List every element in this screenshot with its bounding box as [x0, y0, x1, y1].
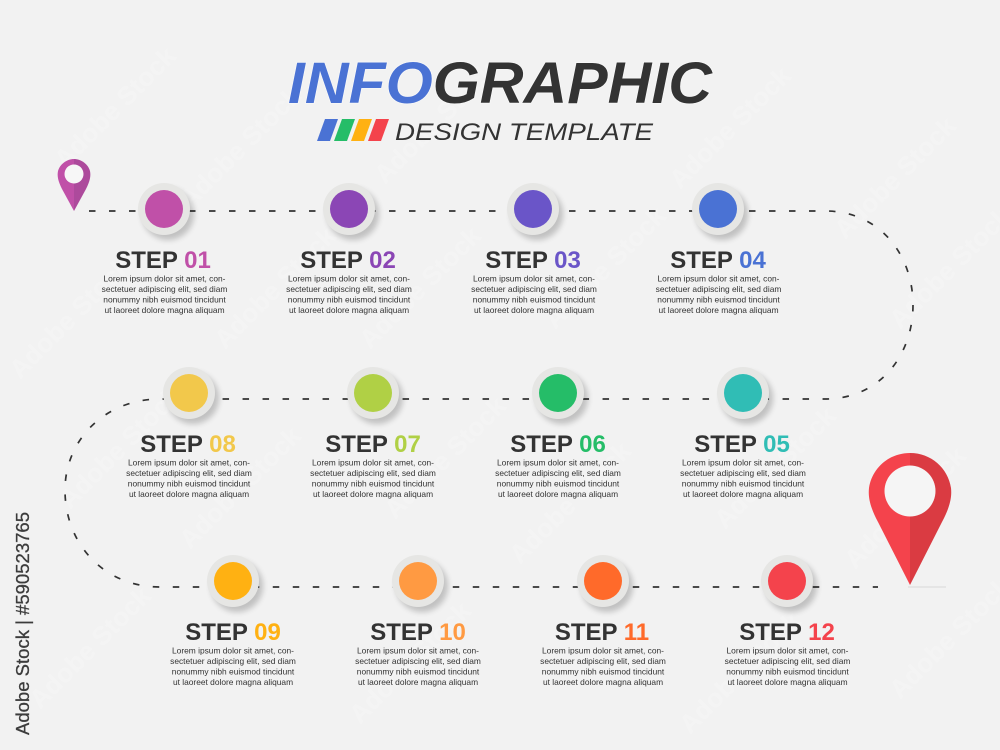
title: INFOGRAPHIC — [288, 51, 713, 116]
step 04: ut laoreet dolore magna aliquam — [658, 305, 779, 315]
step 05: STEP 05 — [694, 431, 790, 458]
step 07: sectetuer adipiscing elit, sed diam — [310, 468, 436, 478]
text: Adobe Stock — [378, 390, 512, 524]
step 07: STEP 07 — [325, 431, 421, 458]
step 03 — [471, 183, 597, 315]
step 03: nonummy nibh euismod tincidunt — [473, 294, 596, 304]
text: Adobe Stock — [673, 605, 807, 739]
step 09: STEP 09 — [185, 619, 281, 646]
step 11: sectetuer adipiscing elit, sed diam — [540, 656, 666, 666]
dashed route path — [65, 211, 913, 587]
step 06: sectetuer adipiscing elit, sed diam — [495, 468, 621, 478]
step 10 — [355, 555, 481, 687]
step 08: Lorem ipsum dolor sit amet, con- — [128, 458, 250, 468]
step 12: Lorem ipsum dolor sit amet, con- — [727, 646, 849, 656]
step 08: ut laoreet dolore magna aliquam — [129, 489, 249, 499]
step 05 — [680, 367, 806, 499]
step 12: sectetuer adipiscing elit, sed diam — [725, 656, 850, 666]
step 02: sectetuer adipiscing elit, sed diam — [286, 284, 412, 294]
step 11: ut laoreet dolore magna aliquam — [543, 677, 663, 687]
step 06: nonummy nibh euismod tincidunt — [497, 478, 620, 488]
step 07 — [310, 367, 436, 499]
text: Adobe Stock — [368, 55, 502, 189]
step 12 — [725, 555, 850, 687]
step 10: STEP 10 — [370, 619, 466, 646]
step 07: Lorem ipsum dolor sit amet, con- — [312, 458, 434, 468]
icon: finish pin — [869, 453, 951, 588]
step 01: STEP 01 — [115, 247, 211, 274]
text: Adobe Stock — [708, 400, 842, 534]
text: Adobe Stock — [23, 580, 157, 714]
text: Adobe Stock — [3, 250, 137, 384]
text: Adobe Stock — [353, 220, 487, 354]
text: Adobe Stock — [663, 60, 797, 194]
text: Adobe Stock — [538, 200, 672, 334]
step 02: Lorem ipsum dolor sit amet, con- — [288, 274, 410, 284]
step 12: STEP 12 — [739, 619, 835, 646]
step 07: nonummy nibh euismod tincidunt — [312, 478, 435, 488]
step 06 — [495, 367, 621, 499]
text: Adobe Stock — [343, 595, 477, 729]
step 08: sectetuer adipiscing elit, sed diam — [126, 468, 252, 478]
step 05: sectetuer adipiscing elit, sed diam — [680, 468, 806, 478]
step 05: Lorem ipsum dolor sit amet, con- — [682, 458, 804, 468]
step 04: Lorem ipsum dolor sit amet, con- — [658, 274, 780, 284]
step 07: ut laoreet dolore magna aliquam — [313, 489, 433, 499]
step 05: nonummy nibh euismod tincidunt — [682, 478, 805, 488]
step 02: ut laoreet dolore magna aliquam — [289, 305, 409, 315]
step 10: sectetuer adipiscing elit, sed diam — [355, 656, 481, 666]
icon: colour stripes — [317, 119, 389, 141]
step 10: nonummy nibh euismod tincidunt — [357, 666, 480, 676]
step 12: ut laoreet dolore magna aliquam — [727, 677, 848, 687]
step 01: nonummy nibh euismod tincidunt — [103, 294, 226, 304]
text: Adobe Stock — [48, 40, 182, 174]
step 08: STEP 08 — [140, 431, 236, 458]
stock credit: Adobe Stock | #590523765 — [13, 512, 33, 735]
step 04: sectetuer adipiscing elit, sed diam — [656, 284, 781, 294]
step 09: Lorem ipsum dolor sit amet, con- — [172, 646, 294, 656]
step 01: ut laoreet dolore magna aliquam — [104, 305, 225, 315]
step 04 — [656, 183, 781, 315]
step 11: STEP 11 — [555, 619, 649, 646]
step 03: sectetuer adipiscing elit, sed diam — [471, 284, 597, 294]
step 11 — [540, 555, 666, 687]
step 02: nonummy nibh euismod tincidunt — [288, 294, 411, 304]
step 02 — [286, 183, 412, 315]
step 10: Lorem ipsum dolor sit amet, con- — [357, 646, 479, 656]
text: Adobe Stock — [53, 380, 187, 514]
step 08: nonummy nibh euismod tincidunt — [128, 478, 251, 488]
step 11: nonummy nibh euismod tincidunt — [542, 666, 665, 676]
step 09: ut laoreet dolore magna aliquam — [173, 677, 293, 687]
text: Adobe Stock — [208, 220, 342, 354]
step 08 — [126, 367, 252, 499]
text: Adobe Stock — [828, 110, 962, 244]
step 03: ut laoreet dolore magna aliquam — [474, 305, 594, 315]
step 06: ut laoreet dolore magna aliquam — [498, 489, 618, 499]
step 03: STEP 03 — [485, 247, 581, 274]
step 09: nonummy nibh euismod tincidunt — [172, 666, 295, 676]
step 02: STEP 02 — [300, 247, 396, 274]
step 10: ut laoreet dolore magna aliquam — [358, 677, 478, 687]
step 04: nonummy nibh euismod tincidunt — [657, 294, 780, 304]
text: Adobe Stock — [173, 420, 307, 554]
text: Adobe Stock — [173, 80, 307, 214]
step 05: ut laoreet dolore magna aliquam — [683, 489, 803, 499]
step 01: Lorem ipsum dolor sit amet, con- — [104, 274, 226, 284]
step 12: nonummy nibh euismod tincidunt — [726, 666, 849, 676]
text: Adobe Stock — [503, 435, 637, 569]
step 09 — [170, 555, 296, 687]
step 01: sectetuer adipiscing elit, sed diam — [102, 284, 227, 294]
subtitle: DESIGN TEMPLATE — [395, 119, 654, 146]
icon: start pin — [58, 159, 90, 211]
step 03: Lorem ipsum dolor sit amet, con- — [473, 274, 595, 284]
step 04: STEP 04 — [670, 247, 766, 274]
step 09: sectetuer adipiscing elit, sed diam — [170, 656, 296, 666]
step 11: Lorem ipsum dolor sit amet, con- — [542, 646, 664, 656]
step 06: Lorem ipsum dolor sit amet, con- — [497, 458, 619, 468]
step 01 — [102, 183, 227, 315]
text: Adobe Stock — [838, 440, 972, 574]
step 06: STEP 06 — [510, 431, 606, 458]
